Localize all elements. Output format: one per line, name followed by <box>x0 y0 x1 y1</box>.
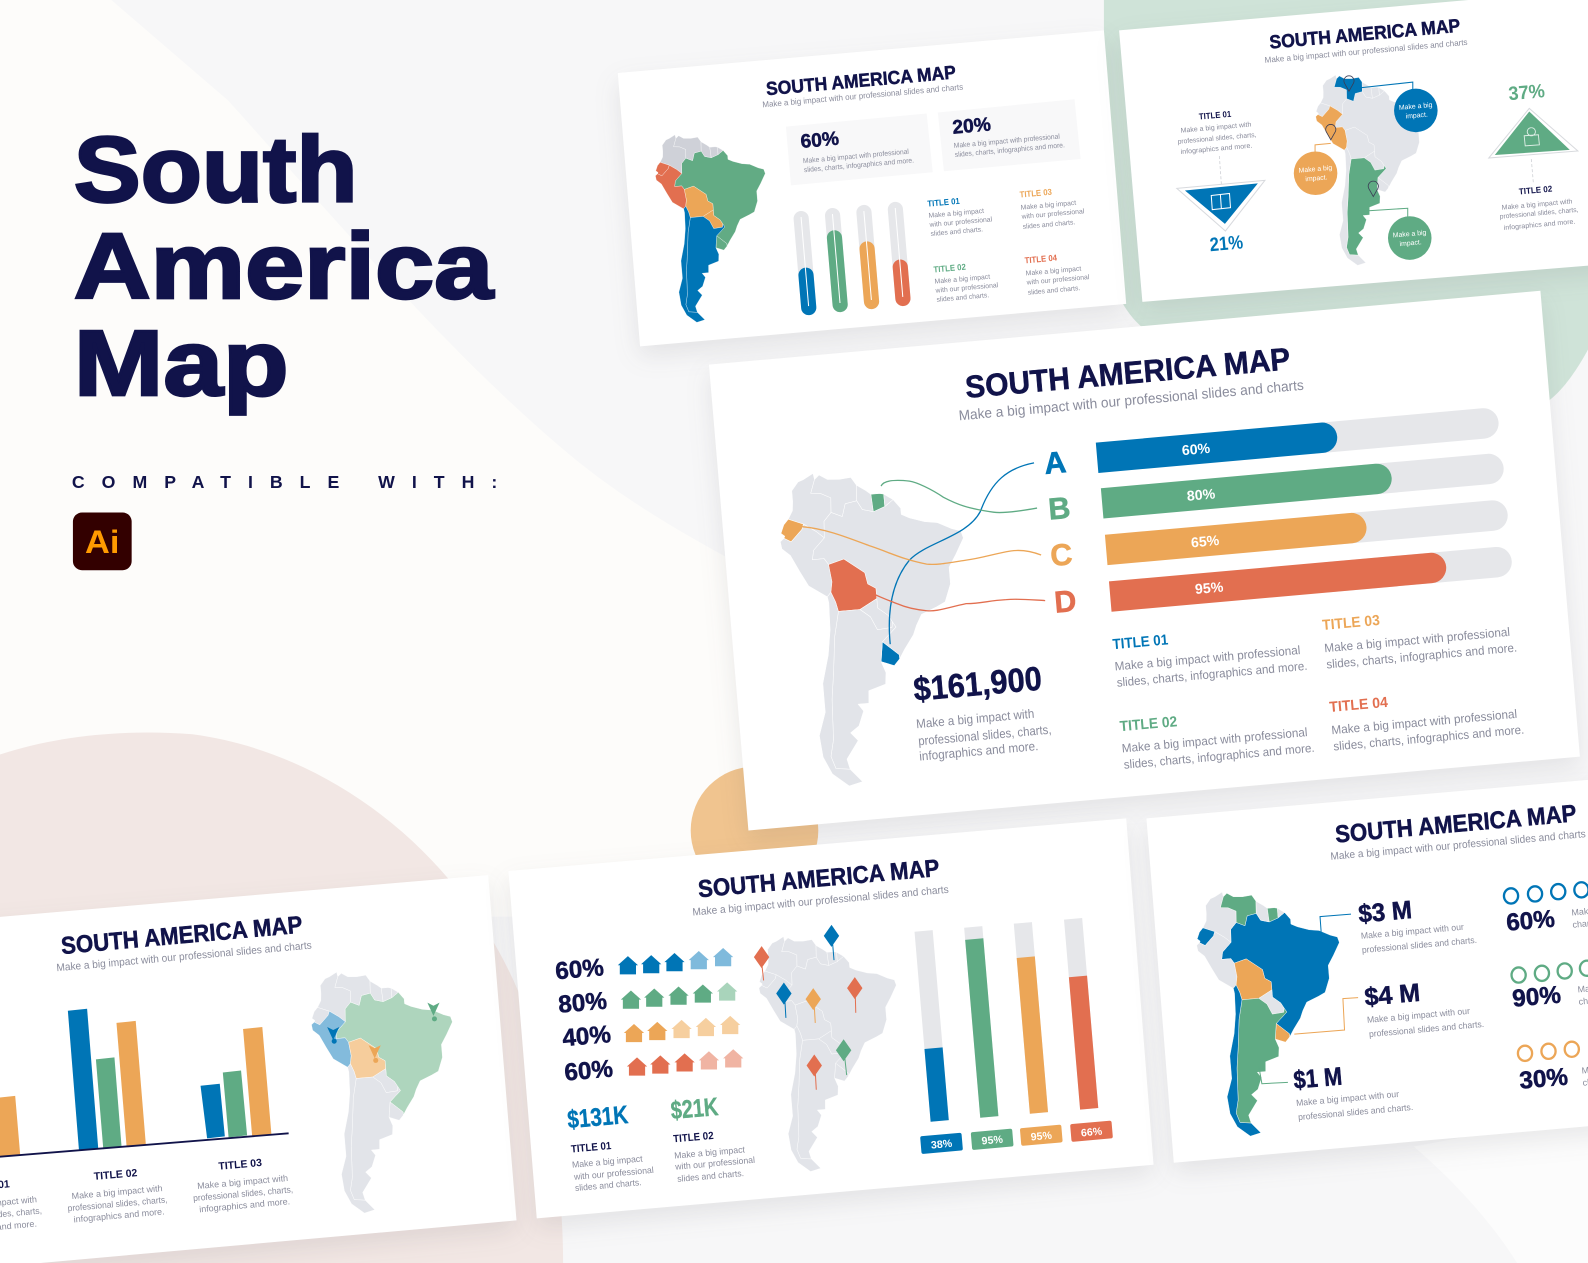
slide heading: SOUTH AMERICA MAP <box>765 61 957 99</box>
text block: title 04 <box>1329 695 1525 753</box>
circle callout blue: Make a big <box>1399 102 1433 112</box>
circle callout blue <box>1394 89 1438 132</box>
value $3 M block: Make a big impact with our <box>1360 922 1464 941</box>
slide subheading: Make a big impact with our professional slides and charts <box>958 378 1304 424</box>
text block: title 03 <box>1019 187 1085 231</box>
card 20% <box>938 99 1081 171</box>
value $21K block: TITLE 02 <box>673 1130 714 1145</box>
bar D 95%: 95% <box>1194 580 1224 598</box>
panel: dollar values and ring percentages slide <box>1146 777 1588 1163</box>
tag 38% <box>920 1133 963 1154</box>
text block: title 03: with our professional <box>1020 208 1085 221</box>
panel: pictogram and tall bars slide <box>508 818 1154 1218</box>
text block: title 04: Make a big impact <box>1025 266 1082 278</box>
label title 02: infographics and more. <box>73 1206 165 1224</box>
text block: title 02: Make a big impact with <box>1501 198 1573 212</box>
tall bar 95% green <box>964 926 998 1118</box>
panel: triangle and circles slide <box>1119 0 1588 302</box>
bar C 65%: 65% <box>1190 533 1220 551</box>
percent 60%: 60% <box>1505 906 1556 937</box>
text block: title 02: professional slides, charts, <box>1499 207 1579 221</box>
text block: title 01: TITLE 01 <box>927 196 960 209</box>
slide heading: SOUTH AMERICA MAP <box>1269 15 1461 53</box>
text block: title 01 <box>1112 632 1308 690</box>
text block: title 04: TITLE 04 <box>1329 695 1389 716</box>
label title 03: professional slides, charts, <box>193 1184 293 1203</box>
column group 3 <box>201 1027 271 1138</box>
value $4 M block <box>1363 979 1484 1039</box>
bar B 80% <box>1101 452 1505 519</box>
value $131K block: $131K <box>566 1101 630 1134</box>
text block: title 01: TITLE 01 <box>1198 109 1232 122</box>
label title 02: TITLE 02 <box>93 1167 138 1183</box>
value block: infographics and more. <box>919 739 1039 764</box>
text block: title 01: TITLE 01 <box>1112 632 1169 653</box>
main title <box>74 118 495 415</box>
percent labels: 80% <box>557 988 608 1019</box>
text block: title 02: slides and charts. <box>936 292 990 304</box>
value $1 M block <box>1292 1063 1414 1122</box>
bar A 60% <box>1096 407 1500 473</box>
main title: Map <box>74 311 289 415</box>
text block: title 02 <box>1499 184 1579 232</box>
ring row 90% <box>1512 961 1588 983</box>
value 21%: 21% <box>1209 232 1244 256</box>
value $1 M block: $1 M <box>1292 1063 1343 1095</box>
circle callout blue: impact. <box>1405 112 1428 121</box>
text block: title 02: with our professional <box>934 282 999 295</box>
letter C: C <box>1049 537 1074 573</box>
value $4 M block: professional slides and charts. <box>1369 1019 1484 1039</box>
ring row 30% <box>1518 1042 1579 1061</box>
text block: title 02: slides, charts, infographics and more. <box>1123 741 1315 772</box>
slide subheading: Make a big impact with our professional slides and charts <box>692 884 949 919</box>
house pictogram rows <box>618 948 743 1076</box>
letter D: D <box>1053 584 1078 620</box>
percent 30%: 30% <box>1518 1064 1569 1095</box>
connector lines <box>1320 914 1351 932</box>
circle callout orange: impact. <box>1305 174 1328 183</box>
label title 03 <box>193 1157 293 1214</box>
inverted triangle 21% <box>1177 180 1265 231</box>
circle callout orange <box>1294 151 1337 195</box>
column group 2 <box>68 1009 146 1151</box>
text block: title 04: with our professional <box>1026 274 1090 287</box>
value block: $161,900 <box>912 661 1043 709</box>
value block: professional slides, charts, <box>918 723 1052 748</box>
text block: title 01: infographics and more. <box>1180 143 1253 156</box>
text block: title 01: Make a big impact <box>928 208 984 220</box>
card 60%: Make a big impact with professional <box>803 148 910 165</box>
value $131K block: slides and charts. <box>575 1177 642 1193</box>
value 37%: 37% <box>1508 81 1546 105</box>
value $1 M block: professional slides and charts. <box>1298 1102 1414 1122</box>
text block: title 01: Make a big impact with professional <box>1114 643 1301 673</box>
card 20%: 20% <box>952 114 992 139</box>
text block: title 03: Make a big impact <box>1020 200 1077 212</box>
bar C 65% <box>1105 499 1509 565</box>
text block: title 04: slides, charts, infographics and more. <box>1333 723 1525 753</box>
card 20%: slides, charts, infographics and more. <box>955 141 1065 159</box>
text block: title 04: Make a big impact with professional <box>1331 707 1518 737</box>
text block: title 03: TITLE 03 <box>1019 187 1052 200</box>
panel: main slide with progress bars <box>709 291 1580 831</box>
percent labels: 60% <box>563 1055 614 1087</box>
circle callout green <box>1388 216 1432 260</box>
label title 02 <box>67 1167 168 1224</box>
connector lines <box>1357 82 1413 90</box>
ring row 60% <box>1504 882 1588 904</box>
text block: title 01: slides and charts. <box>930 226 983 238</box>
label title 02: Make a big impact with <box>71 1183 163 1201</box>
label title 03: TITLE 03 <box>218 1157 262 1173</box>
text block: title 02: Make a big impact <box>934 274 991 286</box>
text block: title 01: professional slides, charts, <box>1177 132 1257 146</box>
value block <box>912 661 1052 764</box>
text block: title 01 <box>1177 109 1257 156</box>
tag 95% green <box>971 1129 1014 1150</box>
value $131K block: Make a big impact <box>572 1153 643 1170</box>
value $21K block: Make a big impact <box>674 1144 746 1161</box>
text block: title 02: TITLE 02 <box>933 262 966 274</box>
text block: title 02: TITLE 02 <box>1119 714 1178 735</box>
bar D 95% <box>1109 546 1513 612</box>
slide subheading: Make a big impact with our professional slides and charts <box>762 82 964 109</box>
slide subheading: Make a big impact with our professional slides and charts <box>56 940 312 974</box>
card 60%: slides, charts, infographics and more. <box>804 156 914 174</box>
map <box>652 127 777 325</box>
value $1 M block: Make a big impact with our <box>1296 1089 1399 1108</box>
circle callout green: impact. <box>1399 239 1422 248</box>
value $131K block: with our professional <box>573 1165 654 1182</box>
text block: title 02: Make a big impact with professional <box>1121 725 1308 756</box>
panel: column chart slide <box>0 875 517 1263</box>
text block: title 01: slides, charts, infographics and more. <box>1116 659 1308 690</box>
tag 38%: 38% <box>931 1138 953 1152</box>
text block: title 02: TITLE 02 <box>1518 184 1553 196</box>
slide subheading: Make a big impact with our professional slides and charts <box>1264 37 1468 65</box>
value $21K block: with our professional <box>674 1155 755 1172</box>
text block: title 02: infographics and more. <box>1504 219 1576 232</box>
tag 95% green: 95% <box>981 1134 1004 1148</box>
text block: title 03: slides, charts, infographics and more. <box>1326 641 1518 671</box>
value $21K block: slides and charts. <box>677 1168 744 1184</box>
percent labels <box>554 954 614 1087</box>
circle callout orange: Make a big <box>1298 165 1333 175</box>
text block: title 02 <box>933 262 999 304</box>
value $4 M block: $4 M <box>1363 979 1421 1012</box>
value $3 M block <box>1357 896 1477 955</box>
bar A 60%: 60% <box>1181 441 1211 459</box>
tag 95% orange <box>1020 1125 1063 1146</box>
map <box>1192 882 1355 1139</box>
tag 95% orange: 95% <box>1030 1130 1053 1143</box>
triangle 37% <box>1489 108 1578 158</box>
map <box>775 461 983 790</box>
map <box>755 927 911 1175</box>
value $21K block: $21K <box>670 1093 720 1125</box>
map pins <box>327 1003 440 1063</box>
main title: South <box>74 118 358 222</box>
card 20%: Make a big impact with professional <box>954 132 1061 150</box>
value $21K block <box>670 1093 755 1184</box>
compatible with label: COMPATIBLE WITH: <box>72 472 497 492</box>
percent labels: 60% <box>554 954 605 985</box>
panel: thermometer slide <box>618 30 1126 346</box>
slide heading: SOUTH AMERICA MAP <box>964 341 1292 405</box>
text block: title 03: slides and charts. <box>1022 219 1076 231</box>
icon: Adobe Illustrator <box>73 513 132 570</box>
value $3 M block: $3 M <box>1357 896 1413 929</box>
map <box>1312 67 1439 268</box>
label title 01 <box>0 1178 42 1237</box>
map <box>307 962 468 1216</box>
tall bar 95% orange <box>1014 922 1048 1114</box>
column group 1 <box>0 1096 20 1158</box>
card 60%: 60% <box>800 129 840 153</box>
text block: title 03 <box>1322 613 1518 671</box>
text block: title 01: Make a big impact with <box>1180 121 1252 135</box>
thermometer bars <box>793 201 911 316</box>
text block: title 03: TITLE 03 <box>1322 613 1380 634</box>
icon: Adobe Illustrator: Ai <box>85 524 120 560</box>
card 60% <box>786 113 933 185</box>
percent 90%: 90% <box>1511 981 1562 1013</box>
connector curves <box>802 463 1045 644</box>
main title: America <box>74 214 495 318</box>
text block: title 04 <box>1024 252 1090 297</box>
label title 03: infographics and more. <box>199 1196 290 1214</box>
value $131K block: TITLE 01 <box>570 1140 612 1156</box>
text block: title 01: with our professional <box>928 216 993 229</box>
label title 02: professional slides, charts, <box>67 1194 168 1213</box>
text block: title 04: slides and charts. <box>1028 285 1081 297</box>
tag 66% <box>1070 1121 1113 1142</box>
bar B 80%: 80% <box>1186 486 1216 505</box>
letter A: A <box>1043 445 1068 481</box>
tall bar 38% <box>915 930 949 1122</box>
text block: title 01 <box>927 196 993 238</box>
diamond pins <box>755 926 862 1090</box>
cut-off ring captions <box>1571 904 1588 1088</box>
text block: title 03: Make a big impact with professional <box>1324 625 1511 655</box>
letter B: B <box>1047 491 1072 527</box>
slide heading: SOUTH AMERICA MAP <box>60 912 303 960</box>
tall bar 66% <box>1064 918 1098 1110</box>
text block: title 02 <box>1119 714 1315 772</box>
text block: title 04: TITLE 04 <box>1024 252 1058 265</box>
label title 03: Make a big impact with <box>197 1173 288 1191</box>
icon: map pins <box>1326 76 1378 197</box>
value $131K block <box>566 1101 654 1193</box>
tag 66%: 66% <box>1081 1126 1103 1139</box>
value $4 M block: Make a big impact with our <box>1367 1006 1470 1025</box>
value $3 M block: professional slides and charts. <box>1361 935 1477 955</box>
percent labels: 40% <box>561 1021 612 1052</box>
slide heading: SOUTH AMERICA MAP <box>697 855 940 903</box>
value block: Make a big impact with <box>916 707 1035 731</box>
circle callout green: Make a big <box>1393 230 1427 240</box>
